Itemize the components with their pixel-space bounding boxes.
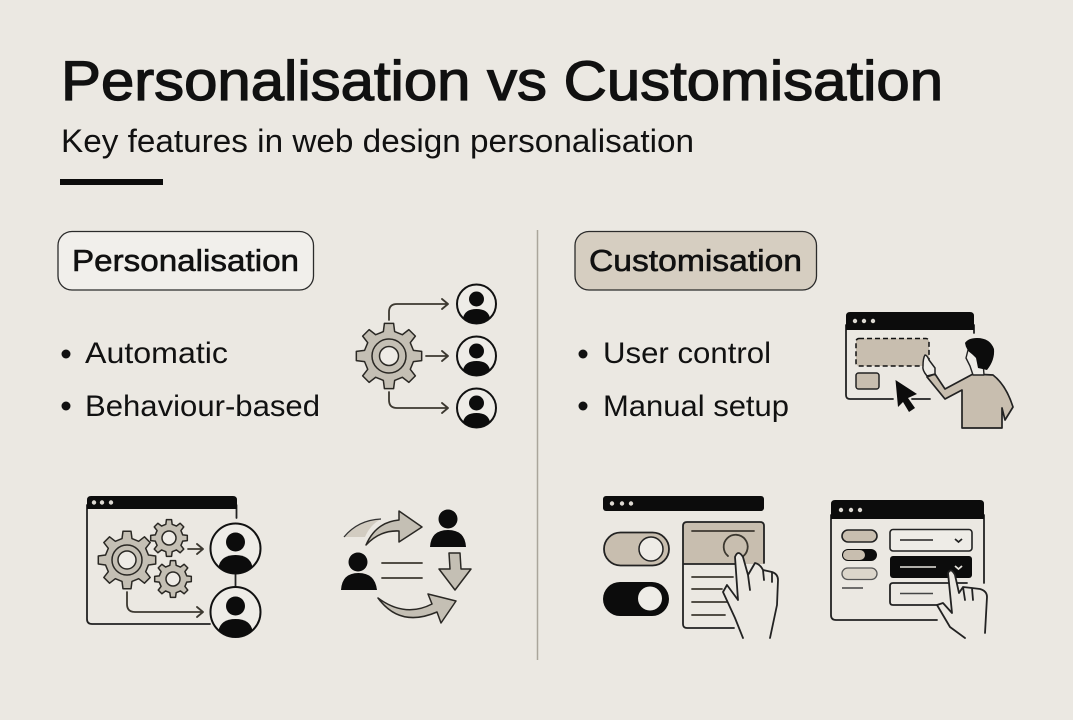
heading pill: Personalisation: Personalisation: [72, 243, 299, 278]
icon: users exchange loop: [341, 510, 471, 623]
bullet list: personalisation features: Behaviour-based: [85, 390, 320, 423]
icon: settings window with dropdowns and hand: [831, 500, 987, 638]
heading pill: Personalisation: [58, 232, 314, 290]
centre divider: [536, 230, 538, 660]
icon: browser window with gears and users: [87, 496, 260, 637]
heading pill: Customisation: Customisation: [589, 243, 802, 278]
bullet list: personalisation features: Automatic: [85, 337, 228, 370]
icon: gear sending to three users: [356, 284, 496, 428]
panel: customisation: [575, 232, 1013, 638]
bullet list: customisation features: [578, 337, 789, 423]
title underline: [60, 179, 163, 185]
bullet list: customisation features: Manual setup: [603, 390, 789, 423]
panel: personalisation: [58, 232, 496, 637]
icon: person pointing at browser window: [846, 312, 1013, 428]
icon: toggles and tapped content card: [603, 496, 778, 638]
heading pill: Customisation: [575, 232, 816, 290]
subtitle: Key features in web design personalisation: [61, 123, 694, 159]
bullet list: personalisation features: [62, 337, 320, 423]
bullet list: customisation features: User control: [603, 337, 771, 370]
title: Personalisation vs Customisation: [61, 49, 943, 112]
